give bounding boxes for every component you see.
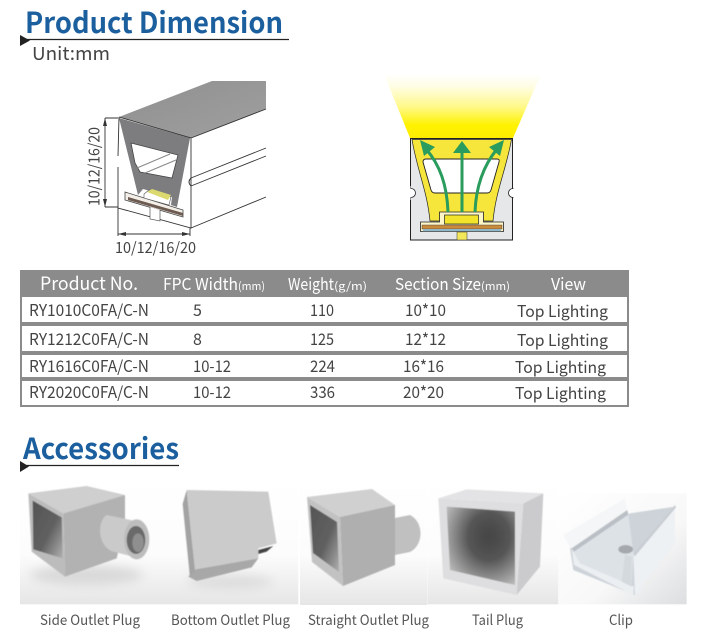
unit label: Unit:mm [32,40,110,66]
table row 2 [29,326,608,351]
table row 2: 12*12 [405,326,446,350]
table row 3: 16*16 [403,353,444,377]
table header: Section Size [395,271,481,295]
table header: (g/m) [334,278,367,294]
table row 1: RY1010C0FA/C-N [29,297,149,321]
accessory: clip [558,493,687,604]
green arrows [426,149,497,212]
table row 1: 5 [193,297,202,321]
captions: Tail Plug [472,610,523,630]
table row 1: 110 [310,297,334,321]
table row 4: 10-12 [193,379,231,403]
table row 4: Top Lighting [515,380,606,404]
table row 3: 224 [310,353,335,377]
table header: View [551,271,586,295]
table header: (mm) [481,278,510,294]
table header [40,270,586,296]
table row 1: Top Lighting [517,298,608,322]
table header: FPC Width [163,271,238,295]
accessory: straight outlet plug [300,480,427,605]
table row 4 [29,379,606,404]
table header: Weight [288,271,334,295]
table header: Product No. [40,270,138,296]
table row 2: 125 [310,326,334,350]
table row 4: RY2020C0FA/C-N [29,379,149,403]
heading: Accessories: Accessories [22,426,179,468]
dimension: width [115,208,196,258]
table row 1: 10*10 [405,297,446,321]
table row 2: Top Lighting [517,327,608,351]
table row 4: 336 [310,379,335,403]
diagram: top lighting light path [384,74,541,240]
dimension: height [84,118,118,207]
table row 3 [29,353,606,378]
table row 3: RY1616C0FA/C-N [29,353,149,377]
captions: Bottom Outlet Plug [171,610,290,630]
table row 2: 8 [193,326,202,350]
table row 1 [29,297,608,322]
captions [40,610,633,630]
table row 3: Top Lighting [515,354,606,378]
dimension: height: 10/12/16/20 [84,127,104,206]
accessory: tail plug [427,480,558,604]
captions: Clip [609,610,633,630]
accessory: side outlet plug [20,480,155,604]
heading: Product Dimension: Product Dimension [25,0,283,42]
table row 2: RY1212C0FA/C-N [29,326,149,350]
table row 4: 20*20 [403,379,444,403]
table header: (mm) [238,278,265,294]
dimension: width: 10/12/16/20 [115,237,196,258]
specification table [20,270,629,407]
captions: Side Outlet Plug [40,610,140,630]
accessory: bottom outlet plug [155,480,298,604]
diagram: profile drawing with dimensions [84,81,266,258]
table row 3: 10-12 [193,353,231,377]
captions: Straight Outlet Plug [308,610,429,630]
light beam [384,74,541,138]
